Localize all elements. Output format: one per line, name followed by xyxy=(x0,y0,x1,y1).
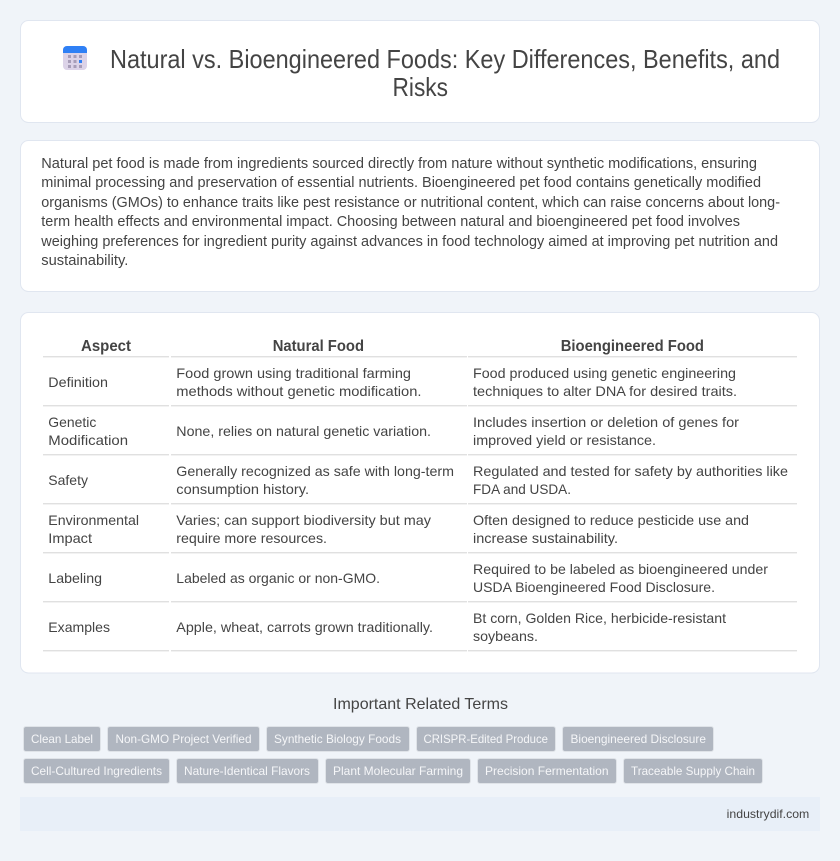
row: genetic modification xyxy=(48,414,739,448)
related term tags: Plant Molecular Farming xyxy=(333,764,463,778)
row: definition: Definition xyxy=(48,374,108,390)
row: environmental impact: Impact xyxy=(48,530,92,546)
panel: introduction paragraph: minimal processing and preservation of essential nutrients. Bioengineered pet food contains genetically modified xyxy=(41,175,761,191)
related term tags: Precision Fermentation xyxy=(485,764,608,778)
row: definition: methods without genetic modification. xyxy=(176,383,422,399)
related term tags: Traceable Supply Chain xyxy=(631,764,755,778)
row: environmental impact: Varies; can support biodiversity but may xyxy=(176,512,431,528)
row: safety: Generally recognized as safe with long-term xyxy=(176,463,454,479)
panel: introduction paragraph: term health effects and environmental impact. Choosing between natural and bioengineered pet food involves xyxy=(41,214,740,230)
row: safety: Regulated and tested for safety by authorities like xyxy=(473,463,788,479)
row: examples: Examples xyxy=(48,619,110,635)
row: safety xyxy=(48,463,788,497)
row: definition: techniques to alter DNA for desired traits. xyxy=(473,383,737,399)
footer bar: industrydif.com xyxy=(727,807,809,821)
icon: calendar xyxy=(63,46,87,70)
related term tags: Nature-Identical Flavors xyxy=(184,764,310,778)
heading: important related terms: Important Related Terms xyxy=(333,696,508,713)
row: definition: Food produced using genetic engineering xyxy=(473,365,736,381)
row: safety: Safety xyxy=(48,472,88,488)
row: examples: soybeans. xyxy=(473,628,538,644)
panel: introduction paragraph: weighing preferences for ingredient purity against advances in food technology aimed at improving pet nutrition and xyxy=(40,234,778,250)
panel: introduction paragraph: organisms (GMOs) to enhance traits like pest resistance or nutritional content, which can raise concerns about long- xyxy=(41,195,780,211)
row: labeling: Labeled as organic or non-GMO. xyxy=(176,570,380,586)
table header row: Aspect xyxy=(81,338,132,355)
row: environmental impact: require more resources. xyxy=(176,530,327,546)
title xyxy=(110,46,780,102)
panel: introduction paragraph: Natural pet food is made from ingredients sourced directly from nature without synthetic modifications, ensuring xyxy=(41,156,757,172)
header panel xyxy=(20,20,820,122)
row: genetic modification: Genetic xyxy=(48,414,96,430)
row: genetic modification: Includes insertion or deletion of genes for xyxy=(473,414,739,430)
row: definition: Food grown using traditional farming xyxy=(176,365,411,381)
related term tags: Cell-Cultured Ingredients xyxy=(31,764,162,778)
row: examples xyxy=(48,610,726,644)
panel: comparison table xyxy=(20,312,820,673)
row: genetic modification: improved yield or resistance. xyxy=(473,432,656,448)
row: genetic modification: Modification xyxy=(48,432,128,448)
related term tags: Clean Label xyxy=(31,732,93,746)
row: labeling: Labeling xyxy=(48,570,102,586)
row: labeling: USDA Bioengineered Food Disclosure. xyxy=(473,579,715,595)
row: definition xyxy=(48,365,737,399)
related term tags: Non-GMO Project Verified xyxy=(116,732,252,746)
row: environmental impact xyxy=(48,512,749,546)
row: examples: Apple, wheat, carrots grown traditionally. xyxy=(176,619,433,635)
table header row: Natural Food xyxy=(273,338,364,355)
related term tags: Bioengineered Disclosure xyxy=(570,732,706,746)
title: Risks xyxy=(392,74,448,102)
panel: introduction paragraph: sustainability. xyxy=(41,253,128,269)
related term tags: Synthetic Biology Foods xyxy=(274,732,401,746)
row: examples: Bt corn, Golden Rice, herbicide-resistant xyxy=(473,610,726,626)
table header row xyxy=(81,338,704,355)
row: labeling: Required to be labeled as bioengineered under xyxy=(473,561,768,577)
related term tags xyxy=(24,726,762,784)
row: environmental impact: increase sustainability. xyxy=(473,530,618,546)
row: safety: FDA and USDA. xyxy=(473,481,571,497)
panel: introduction paragraph xyxy=(20,140,820,292)
row: genetic modification: None, relies on natural genetic variation. xyxy=(176,423,431,439)
title: Natural vs. Bioengineered Foods: Key Differences, Benefits, and xyxy=(110,46,780,74)
row: labeling xyxy=(48,561,768,595)
related term tags: CRISPR-Edited Produce xyxy=(424,732,548,746)
row: safety: consumption history. xyxy=(176,481,309,497)
footer bar xyxy=(20,797,820,831)
row: environmental impact: Often designed to reduce pesticide use and xyxy=(473,512,749,528)
row: environmental impact: Environmental xyxy=(48,512,139,528)
table header row: Bioengineered Food xyxy=(561,338,704,355)
